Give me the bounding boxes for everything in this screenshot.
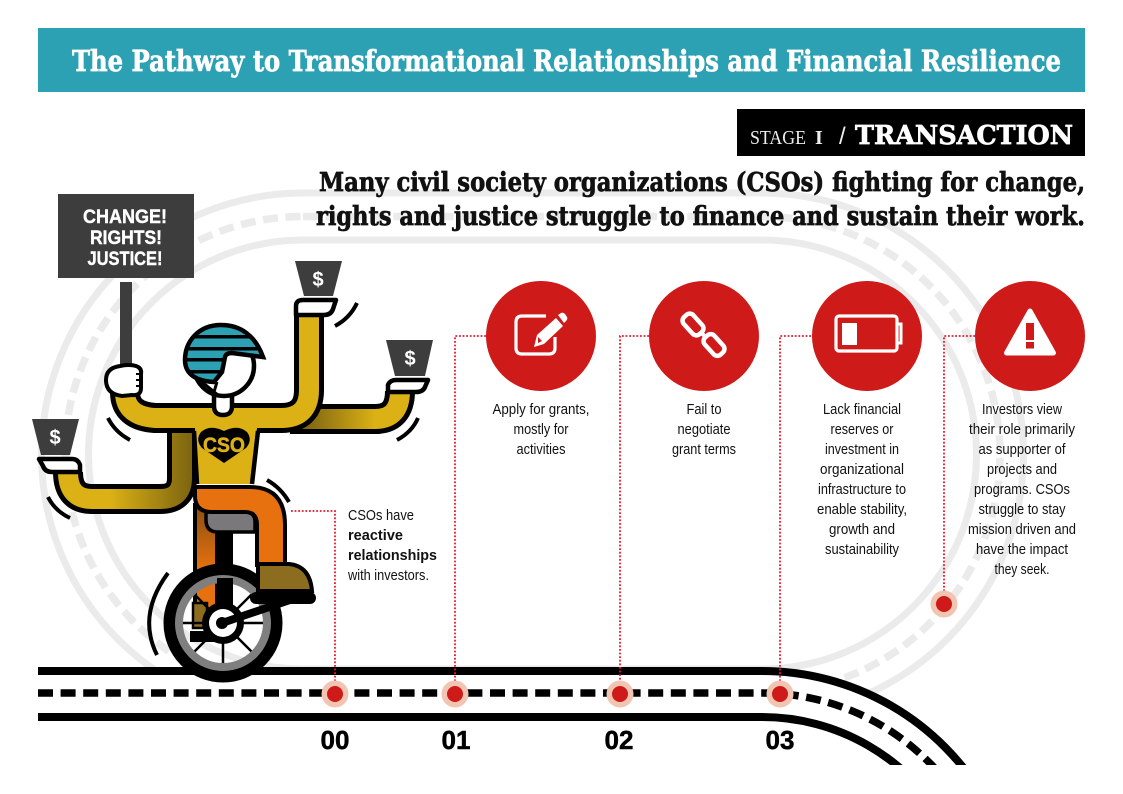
milestone numbers bbox=[321, 725, 794, 755]
text: step 03: infrastructure to bbox=[818, 482, 906, 498]
stage label: TRANSACTION bbox=[855, 121, 1073, 151]
text: step 03: sustainability bbox=[825, 542, 900, 558]
chin strap bbox=[202, 382, 218, 395]
text: step 03: enable stability, bbox=[817, 502, 907, 518]
seat bbox=[206, 512, 255, 532]
text: step 04: mission driven and bbox=[968, 522, 1076, 538]
figure: unicycle rider bbox=[32, 261, 433, 675]
text: step 02 bbox=[672, 402, 736, 458]
protest sign: RIGHTS! bbox=[90, 228, 162, 249]
icon: note and pencil bbox=[486, 281, 596, 391]
icon: warning triangle bbox=[975, 281, 1085, 391]
text: step 00: with investors. bbox=[347, 568, 429, 584]
shoe bbox=[256, 564, 312, 598]
text: step 03: Lack financial bbox=[823, 402, 901, 418]
text: step 04: struggle to stay bbox=[978, 502, 1066, 518]
text: step 04: Investors view bbox=[982, 402, 1062, 418]
text: step 03 bbox=[817, 402, 907, 558]
protest sign: JUSTICE! bbox=[88, 249, 162, 270]
text: step 03: reserves or bbox=[830, 422, 894, 438]
stage label: STAGE bbox=[750, 127, 806, 149]
protest sign bbox=[58, 194, 194, 372]
milestone numbers: 00 bbox=[321, 725, 349, 755]
icon: broken chain bbox=[649, 281, 759, 391]
text: step 04: as supporter of bbox=[978, 442, 1066, 458]
background: grey road loop bbox=[41, 193, 1023, 716]
text: step 00: relationships bbox=[348, 548, 437, 564]
text: step 04 bbox=[968, 402, 1076, 578]
text: step 00: CSOs have bbox=[348, 508, 414, 524]
money buckets: $ bbox=[49, 427, 61, 449]
motion arcs bbox=[48, 303, 418, 655]
seat post bbox=[217, 525, 233, 623]
milestone dots bbox=[322, 590, 958, 708]
text: step 00: reactive bbox=[348, 528, 403, 544]
text: step 04: programs. CSOs bbox=[974, 482, 1070, 498]
protest sign: CHANGE! bbox=[83, 207, 167, 228]
money buckets: $ bbox=[404, 348, 416, 370]
text: step 01: mostly for bbox=[514, 422, 569, 438]
milestone numbers: 01 bbox=[442, 725, 470, 755]
text: step 00 bbox=[347, 508, 437, 584]
neck bbox=[214, 395, 232, 415]
milestone numbers: 02 bbox=[605, 725, 633, 755]
helmet bbox=[180, 325, 270, 382]
rear leg bbox=[193, 505, 217, 628]
text: step 03: growth and bbox=[829, 522, 895, 538]
text: step 04: their role primarily bbox=[969, 422, 1076, 438]
icon: low battery bbox=[812, 281, 922, 391]
text: step 02: grant terms bbox=[672, 442, 736, 458]
fist bbox=[106, 365, 142, 396]
heading bbox=[316, 168, 1085, 232]
money buckets: $ bbox=[312, 269, 324, 291]
black road bbox=[38, 667, 966, 765]
text: step 01 bbox=[492, 402, 590, 458]
stage label: / bbox=[839, 123, 846, 150]
milestone numbers: 03 bbox=[766, 725, 794, 755]
text: step 04: have the impact bbox=[976, 542, 1068, 558]
stage label bbox=[737, 109, 1085, 156]
text: step 01: Apply for grants, bbox=[492, 402, 590, 418]
text: step 02: Fail to bbox=[686, 402, 722, 418]
money buckets bbox=[32, 261, 433, 455]
cuffs bbox=[39, 300, 428, 472]
stage label: I bbox=[815, 127, 823, 149]
text: step 04: they seek. bbox=[994, 562, 1050, 578]
text: step 04: projects and bbox=[987, 462, 1057, 478]
text: step 01: activities bbox=[516, 442, 566, 458]
front leg bbox=[195, 487, 285, 565]
wheel bbox=[171, 571, 290, 675]
text: step 03: investment in bbox=[825, 442, 899, 458]
text: step 03: organizational bbox=[820, 462, 904, 478]
rear left arm bbox=[68, 432, 182, 499]
rear right arm bbox=[290, 391, 400, 419]
torso bbox=[194, 428, 258, 484]
chest logo: CSO bbox=[203, 434, 245, 457]
chest logo bbox=[198, 428, 250, 463]
front arms bbox=[125, 314, 309, 418]
title banner bbox=[38, 28, 1085, 92]
face bbox=[194, 336, 254, 396]
dotted connector lines bbox=[291, 336, 975, 682]
text: step 02: negotiate bbox=[678, 422, 730, 438]
